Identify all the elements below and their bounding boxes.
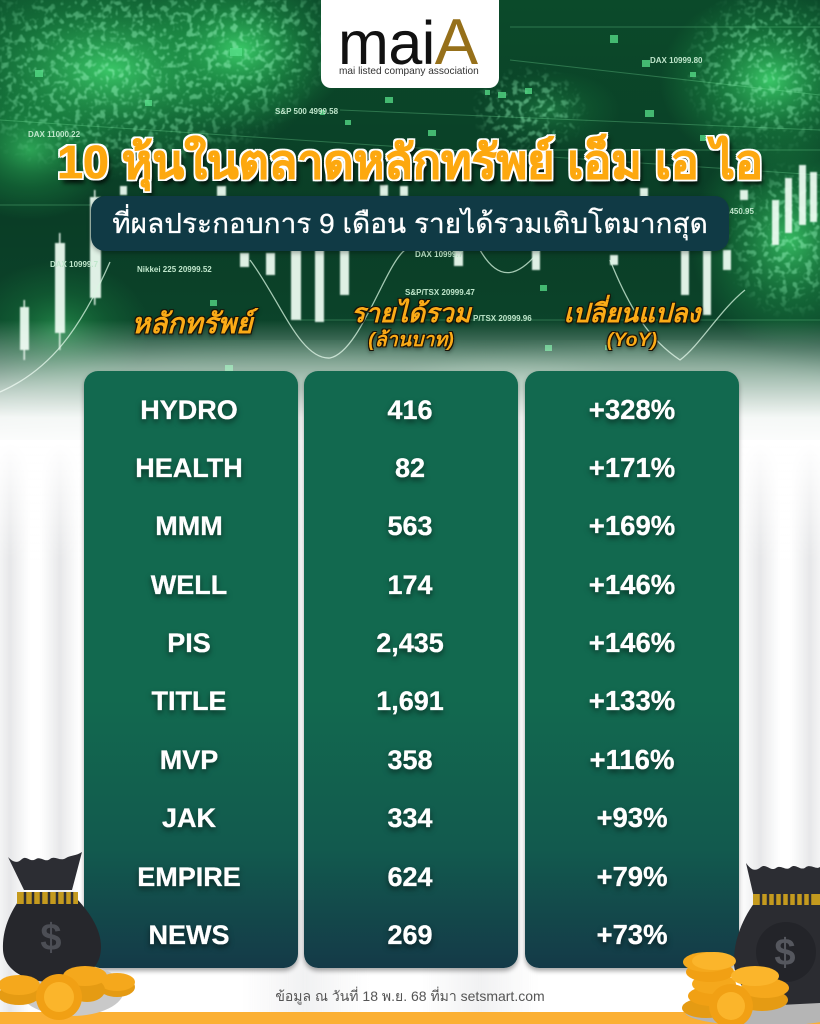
panel: revenue: 174 <box>387 570 433 600</box>
bottom orange bar <box>0 1012 820 1024</box>
background: green stock market scene: DAX 10999.80 <box>650 56 703 65</box>
panel: securities: MVP <box>160 745 218 775</box>
logo card <box>321 0 499 88</box>
column heading: revenue <box>351 297 474 354</box>
panel: securities <box>84 371 298 968</box>
panel: YoY change <box>525 371 739 968</box>
column heading: change <box>564 294 705 354</box>
panel: YoY change: +328% <box>589 394 675 425</box>
title: 10 หุ้นในตลาดหลักทรัพย์ เอ็ม เอ ไอ <box>57 136 763 188</box>
panel: revenue <box>304 371 518 968</box>
panel: securities: HEALTH <box>135 453 243 483</box>
panel: securities: TITLE <box>152 686 226 716</box>
column heading: revenue: (ล้านบาท) <box>368 329 454 351</box>
panel: YoY change: +93% <box>596 802 668 833</box>
panel: YoY change: +73% <box>596 919 668 950</box>
panel: YoY change: +116% <box>590 744 674 775</box>
panel: YoY change: +133% <box>589 685 675 716</box>
panel: revenue: 624 <box>387 862 433 892</box>
column heading: revenue: รายได้รวม <box>351 298 471 328</box>
subtitle bar <box>91 196 729 251</box>
logo tagline: mai listed company association <box>339 66 479 77</box>
panel: securities: MMM <box>155 511 223 541</box>
background: green stock market scene: DAX 10999.7 <box>50 260 99 269</box>
panel: YoY change: +169% <box>589 510 675 541</box>
icon: money bag and coins left: $ <box>40 917 62 959</box>
icon: money bag and coins right: $ <box>774 932 796 974</box>
panel: revenue: 269 <box>387 920 433 950</box>
column heading: securities: หลักทรัพย์ <box>132 308 252 339</box>
panel: YoY change: +79% <box>596 861 668 892</box>
background: green stock market scene: P/TSX 20999.96 <box>473 314 532 323</box>
panel: securities: NEWS <box>148 920 230 950</box>
panel: revenue: 334 <box>387 803 433 833</box>
panel: YoY change: +171% <box>589 452 675 483</box>
background: green stock market scene: 1450.95 <box>725 207 754 216</box>
panel: securities: HYDRO <box>140 395 238 425</box>
panel: revenue: 2,435 <box>376 628 444 658</box>
panel: revenue: 416 <box>387 395 433 425</box>
panel: revenue: 1,691 <box>376 686 444 716</box>
panel: YoY change: +146% <box>589 627 675 658</box>
column heading: change: (YoY) <box>607 329 657 351</box>
icon: money bag and coins right <box>682 863 820 1024</box>
subtitle bar: ที่ผลประกอบการ 9 เดือน รายได้รวมเติบโตมากสุด <box>112 208 708 239</box>
panel: securities: JAK <box>162 803 216 833</box>
panel: securities: WELL <box>151 570 227 600</box>
icon: money bag and coins left <box>0 852 135 1020</box>
background: green stock market scene: DAX 10999.7 <box>415 250 464 259</box>
column heading: change: เปลี่ยนแปลง <box>564 298 700 328</box>
background: green stock market scene: Nikkei 225 20999.52 <box>137 265 212 274</box>
panel: YoY change: +146% <box>589 569 675 600</box>
panel: securities: EMPIRE <box>137 862 241 892</box>
panel: revenue: 82 <box>395 453 425 483</box>
logo wordmark: maiA <box>338 5 478 78</box>
background: green stock market scene: S&P 500 4999.58 <box>275 107 339 116</box>
panel: revenue: 358 <box>387 745 433 775</box>
panel: revenue: 563 <box>387 511 433 541</box>
background: green stock market scene: S&P/TSX 20999.47 <box>405 288 475 297</box>
source note: ข้อมูล ณ วันที่ 18 พ.ย. 68 ที่มา setsmart.com <box>275 988 545 1004</box>
panel: securities: PIS <box>167 628 211 658</box>
background: green stock market scene: DAX 11000.22 <box>28 130 81 139</box>
